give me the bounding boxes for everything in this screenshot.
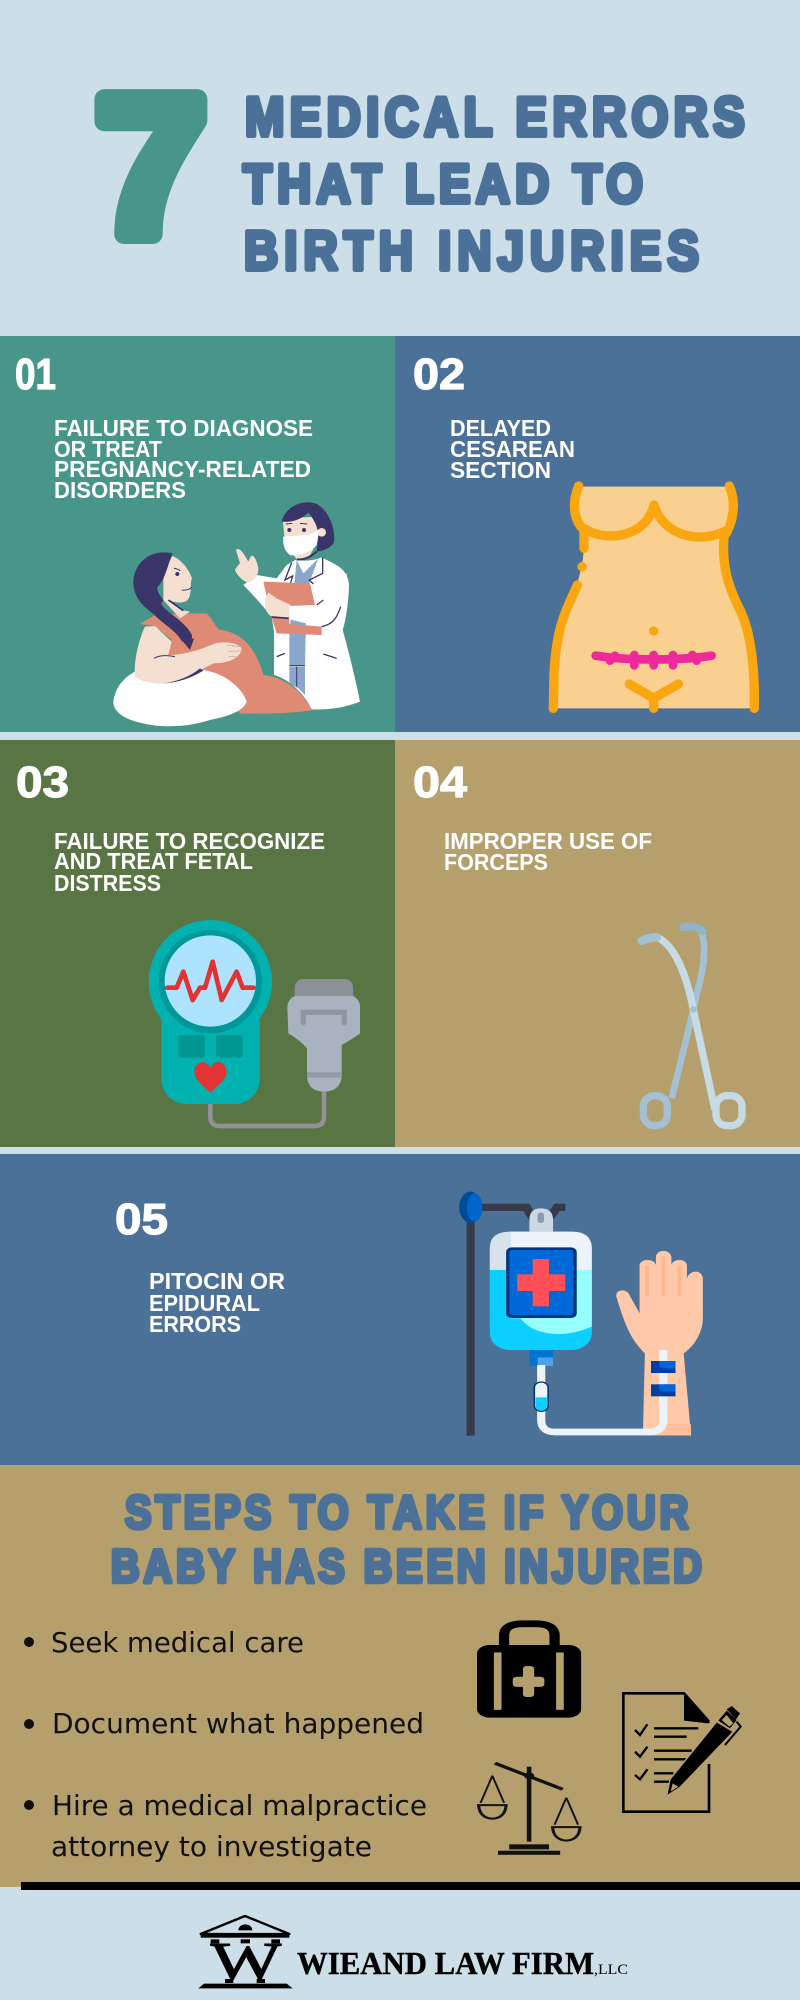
title: BIRTH INJURIES (244, 220, 699, 281)
number 05: 05 (115, 1195, 168, 1244)
title: THAT LEAD TO (243, 153, 643, 214)
logo mark: W (211, 1932, 282, 1990)
text: fetal distress: DISTRESS (54, 870, 161, 896)
panel 01: failure to diagnose (0, 336, 395, 732)
illustration: pregnant patient and doctor (113, 502, 360, 726)
text: failure to diagnose: FAILURE TO DIAGNOSE (54, 415, 313, 441)
firm name: ,LLC (594, 1962, 628, 1978)
number 01: 01 (15, 350, 56, 399)
icon: medical bag (477, 1624, 581, 1718)
text: delayed cesarean section: DELAYED (450, 415, 551, 441)
illustration: forceps (642, 926, 742, 1126)
heading: steps: STEPS TO TAKE IF YOUR (125, 1487, 688, 1539)
heading: steps (111, 1487, 702, 1593)
bullet list: Document what happened (52, 1707, 424, 1740)
text: improper use of forceps: FORCEPS (444, 849, 548, 875)
text: fetal distress: AND TREAT FETAL (54, 848, 253, 874)
text: delayed cesarean section: CESAREAN (450, 436, 575, 462)
number 02: 02 (413, 350, 465, 399)
title: MEDICAL ERRORS (245, 86, 745, 147)
title (243, 86, 745, 281)
panel: steps to take (0, 1465, 800, 1887)
text: fetal distress (54, 828, 325, 896)
text: improper use of forceps (444, 828, 652, 875)
illustration: fetal monitor (149, 920, 360, 1126)
bullet list: attorney to investigate (51, 1830, 372, 1863)
text: failure to diagnose: PREGNANCY-RELATED (54, 456, 311, 482)
doctor (235, 502, 360, 709)
text: improper use of forceps: IMPROPER USE OF (444, 828, 652, 854)
text: pitocin or epidural errors: PITOCIN OR (149, 1268, 285, 1294)
number 04: 04 (413, 758, 468, 807)
text: delayed cesarean section: SECTION (450, 457, 551, 483)
header (96, 57, 745, 281)
panel 03: fetal distress (0, 740, 395, 1147)
text: failure to diagnose: OR TREAT (54, 436, 162, 462)
text: pitocin or epidural errors: EPIDURAL (149, 1290, 260, 1316)
panel 05: pitocin or epidural (0, 1154, 800, 1465)
bullet list: Hire a medical malpractice (52, 1789, 427, 1822)
number 03: 03 (16, 758, 69, 807)
heading: steps: BABY HAS BEEN INJURED (111, 1541, 702, 1593)
text: failure to diagnose: DISORDERS (54, 477, 186, 503)
text: delayed cesarean section (450, 415, 575, 483)
bullet list (24, 1626, 427, 1863)
footer logo (198, 1916, 628, 1990)
icon: checklist and pen (623, 1693, 741, 1812)
text: pitocin or epidural errors: ERRORS (149, 1311, 241, 1337)
bullet list: Seek medical care (51, 1626, 304, 1659)
illustration: abdomen with scar (553, 486, 755, 708)
panel 04: forceps (395, 740, 800, 1147)
big numeral 7: 7 (96, 57, 206, 276)
patient (113, 552, 312, 726)
text: failure to diagnose (54, 415, 313, 503)
text: pitocin or epidural errors (149, 1268, 285, 1337)
icon: scales of justice (479, 1763, 580, 1855)
panel 02: delayed cesarean (395, 336, 800, 732)
logo mark (198, 1916, 293, 1990)
text: fetal distress: FAILURE TO RECOGNIZE (54, 828, 325, 854)
illustration: IV drip and hand (459, 1192, 703, 1436)
firm name: WIEAND LAW FIRM (297, 1945, 594, 1981)
